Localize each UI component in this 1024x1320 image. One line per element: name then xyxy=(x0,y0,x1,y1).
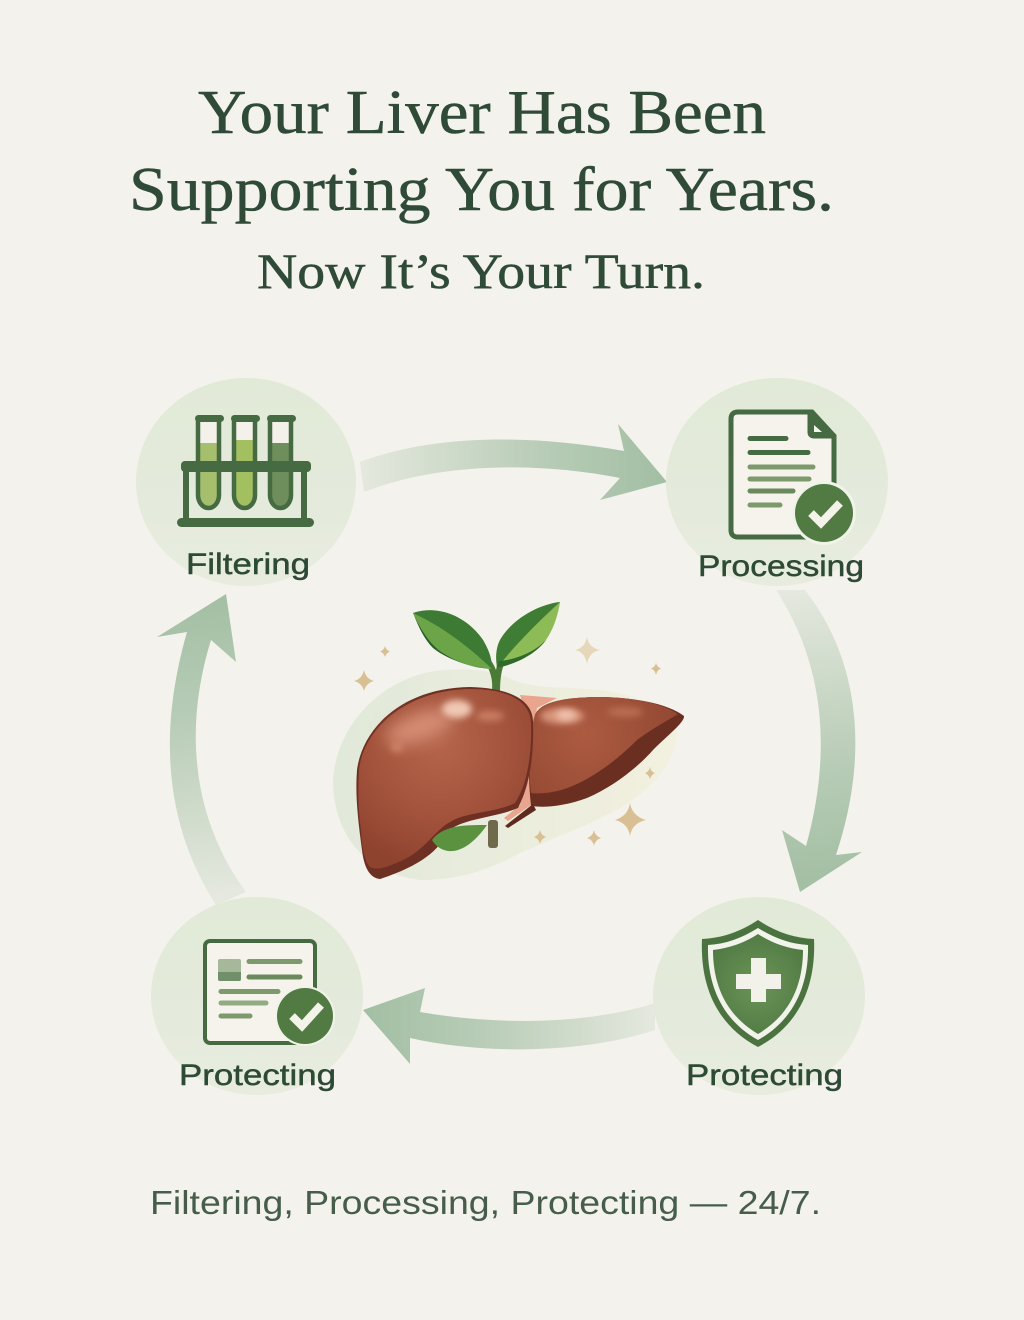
arrow: processing to protecting xyxy=(776,590,862,892)
title: Supporting You for Years. xyxy=(129,156,834,224)
small leaf under liver xyxy=(432,825,487,851)
left lobe xyxy=(356,687,533,879)
sprout stem xyxy=(484,655,507,692)
right leaf xyxy=(496,602,560,668)
panel: processing xyxy=(666,378,888,586)
circle: protecting shield xyxy=(653,897,865,1095)
panel: filtering xyxy=(136,378,356,586)
icon: report with check xyxy=(205,941,335,1046)
label: filtering: Filtering xyxy=(186,548,310,581)
footer tagline: Filtering, Processing, Protecting — 24/7. xyxy=(150,1184,821,1221)
icon: shield with cross xyxy=(702,920,814,1047)
arrow: protecting to filtering xyxy=(157,594,246,905)
left leaf xyxy=(413,610,492,669)
circle: processing xyxy=(666,378,888,586)
icon: test tubes xyxy=(177,415,314,527)
icon: document with check xyxy=(731,412,856,545)
panel: protecting shield xyxy=(653,897,865,1095)
glow blob behind liver xyxy=(333,669,677,880)
duct xyxy=(488,820,498,848)
pink ligament xyxy=(504,695,557,821)
label: protecting document: Protecting xyxy=(179,1059,336,1092)
arrow: protecting to protecting xyxy=(363,988,655,1064)
title xyxy=(129,79,834,299)
illustration: liver with leaves xyxy=(333,602,684,880)
circle: filtering xyxy=(136,378,356,586)
dark sliver xyxy=(505,804,536,828)
circle: protecting document xyxy=(151,897,363,1095)
right lobe xyxy=(529,697,684,807)
sparkles xyxy=(354,637,661,846)
arrow: filtering to processing xyxy=(360,424,667,500)
label: processing: Processing xyxy=(698,550,864,583)
title: Now It’s Your Turn. xyxy=(257,243,705,299)
title: Your Liver Has Been xyxy=(198,79,766,147)
panel: protecting document xyxy=(151,897,363,1095)
label: protecting shield: Protecting xyxy=(686,1059,843,1092)
